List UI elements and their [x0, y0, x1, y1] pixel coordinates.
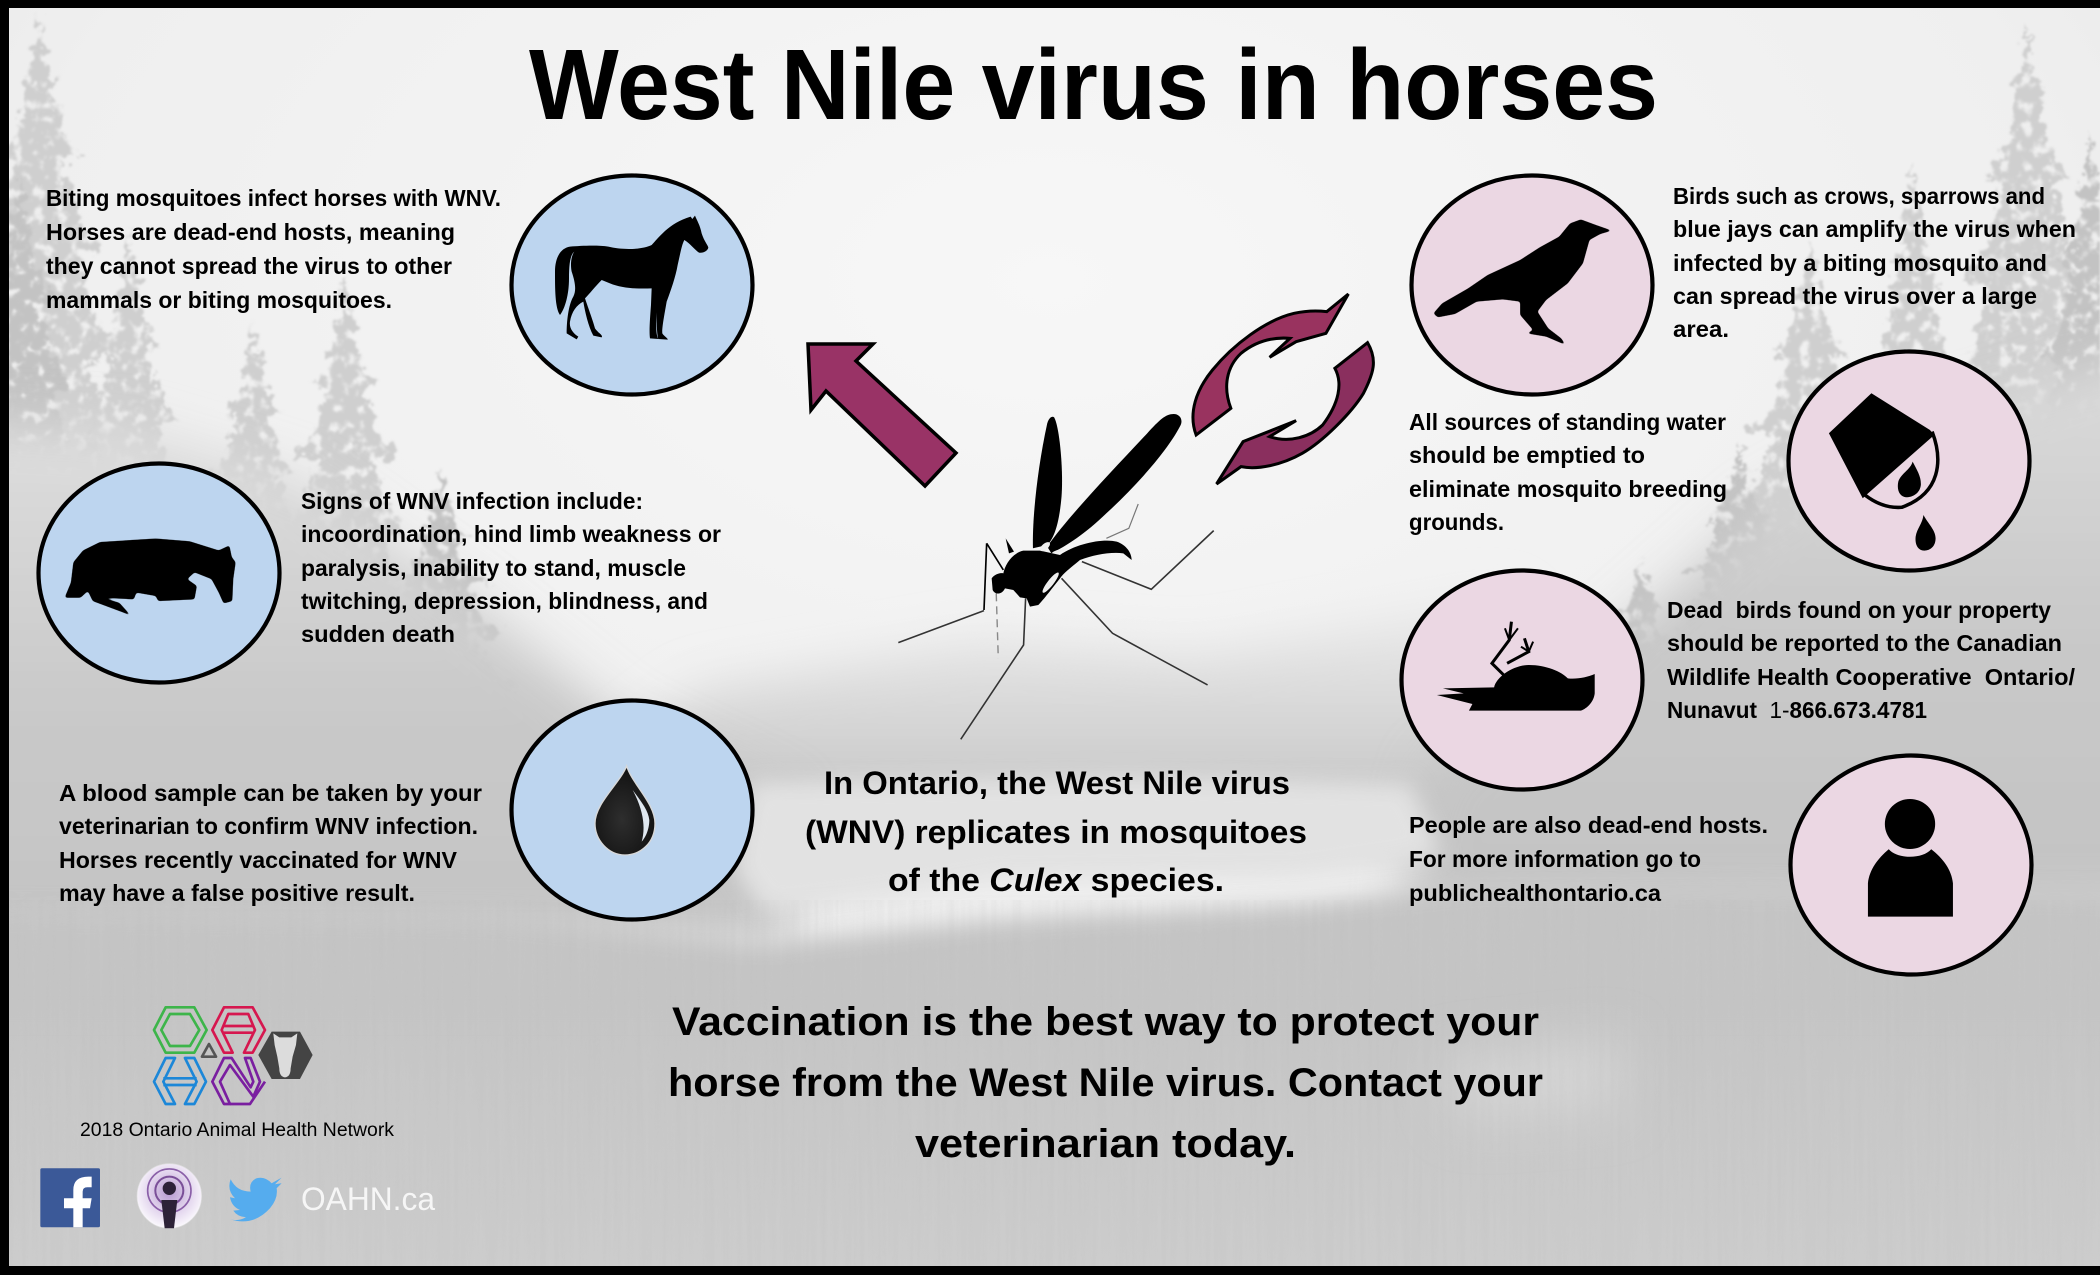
mosquito silhouette — [898, 414, 1214, 739]
icon: bucket tipping water — [1788, 352, 2030, 570]
text: standing water: grounds. — [1409, 509, 1504, 535]
text: copyright line: 2018 Ontario Animal Health Network — [80, 1120, 395, 1141]
text: standing water: All sources of standing water — [1409, 409, 1726, 435]
panel: blood sample — [59, 700, 752, 920]
text: birds: can spread the virus over a large — [1673, 283, 2037, 309]
text: dead birds: Dead birds found on your property — [1667, 597, 2051, 623]
panel: people — [1409, 756, 2032, 974]
text: culex species — [805, 765, 1307, 898]
text: signs of WNV infection: incoordination, hind limb weakness or — [301, 521, 721, 547]
callout: vaccination message: veterinarian today. — [915, 1122, 1296, 1166]
text: horses are dead-end hosts: Biting mosquitoes infect horses with WNV. — [46, 185, 501, 211]
text: horses are dead-end hosts — [46, 185, 501, 313]
icon: person — [1790, 756, 2032, 974]
callout: vaccination message: Vaccination is the best way to protect your — [672, 1000, 1539, 1044]
icon: podcast — [137, 1164, 202, 1228]
text: culex species: of the Culex species. — [888, 862, 1224, 898]
icon: facebook — [40, 1168, 100, 1227]
text: blood sample — [59, 780, 482, 906]
icon: blood drop — [512, 700, 752, 920]
text: birds: blue jays can amplify the virus when — [1673, 216, 2076, 242]
text: people — [1409, 812, 1768, 906]
text: dead birds: Wildlife Health Cooperative Ontario/ — [1667, 664, 2076, 690]
text: website: OAHN.ca — [301, 1181, 435, 1217]
panel: signs of infection — [38, 464, 721, 682]
text: signs of WNV infection — [301, 488, 721, 647]
panel: birds amplify — [1412, 176, 2076, 394]
icon: downed horse — [38, 464, 280, 682]
text: dead birds — [1667, 597, 2076, 723]
callout: vaccination message: horse from the West Nile virus. Contact your — [668, 1061, 1543, 1105]
panel: horse infection — [46, 176, 752, 394]
text: dead birds: should be reported to the Canadian — [1667, 630, 2062, 656]
icon: crow — [1412, 176, 1652, 394]
text: standing water: eliminate mosquito breeding — [1409, 476, 1727, 502]
text: people: publichealthontario.ca — [1409, 880, 1661, 906]
text: birds: infected by a biting mosquito and — [1673, 250, 2047, 276]
text: people: People are also dead-end hosts. — [1409, 812, 1768, 838]
text: culex species: (WNV) replicates in mosquitoes — [805, 814, 1307, 850]
text: birds: Birds such as crows, sparrows and — [1673, 183, 2045, 209]
text: culex species: In Ontario, the West Nile virus — [824, 765, 1290, 801]
panel: standing water — [1409, 352, 2030, 570]
text: standing water — [1409, 409, 1727, 535]
callout: vaccination message — [668, 1000, 1543, 1166]
text: horses are dead-end hosts: Horses are dead-end hosts, meaning — [46, 219, 455, 245]
text: signs of WNV infection: paralysis, inability to stand, muscle — [301, 555, 686, 581]
arrows: mosquito bird cycle — [1193, 294, 1373, 484]
title: West Nile virus in horses — [529, 29, 1658, 141]
icon: dead bird — [1402, 570, 1642, 790]
text: signs of WNV infection: Signs of WNV infection include: — [301, 488, 643, 514]
text: blood sample: veterinarian to confirm WNV infection. — [59, 813, 478, 839]
icon: standing horse — [512, 176, 752, 394]
text: horses are dead-end hosts: mammals or biting mosquitoes. — [46, 287, 392, 313]
text: dead birds: Nunavut 1-866.673.4781 — [1667, 697, 1927, 723]
logo: OAHN hexagons — [154, 1007, 313, 1104]
text: blood sample: may have a false positive result. — [59, 880, 415, 906]
text: standing water: should be emptied to — [1409, 442, 1645, 468]
text: blood sample: Horses recently vaccinated for WNV — [59, 847, 458, 873]
panel: dead birds — [1402, 570, 2076, 790]
text: birds: area. — [1673, 316, 1729, 342]
text: horses are dead-end hosts: they cannot spread the virus to other — [46, 253, 452, 279]
text: signs of WNV infection: sudden death — [301, 621, 455, 647]
text: people: For more information go to — [1409, 846, 1701, 872]
text: birds — [1673, 183, 2076, 342]
text: signs of WNV infection: twitching, depression, blindness, and — [301, 588, 708, 614]
arrow: mosquito to horse — [808, 344, 956, 486]
text: blood sample: A blood sample can be taken by your — [59, 780, 482, 806]
icon: twitter — [229, 1178, 282, 1221]
